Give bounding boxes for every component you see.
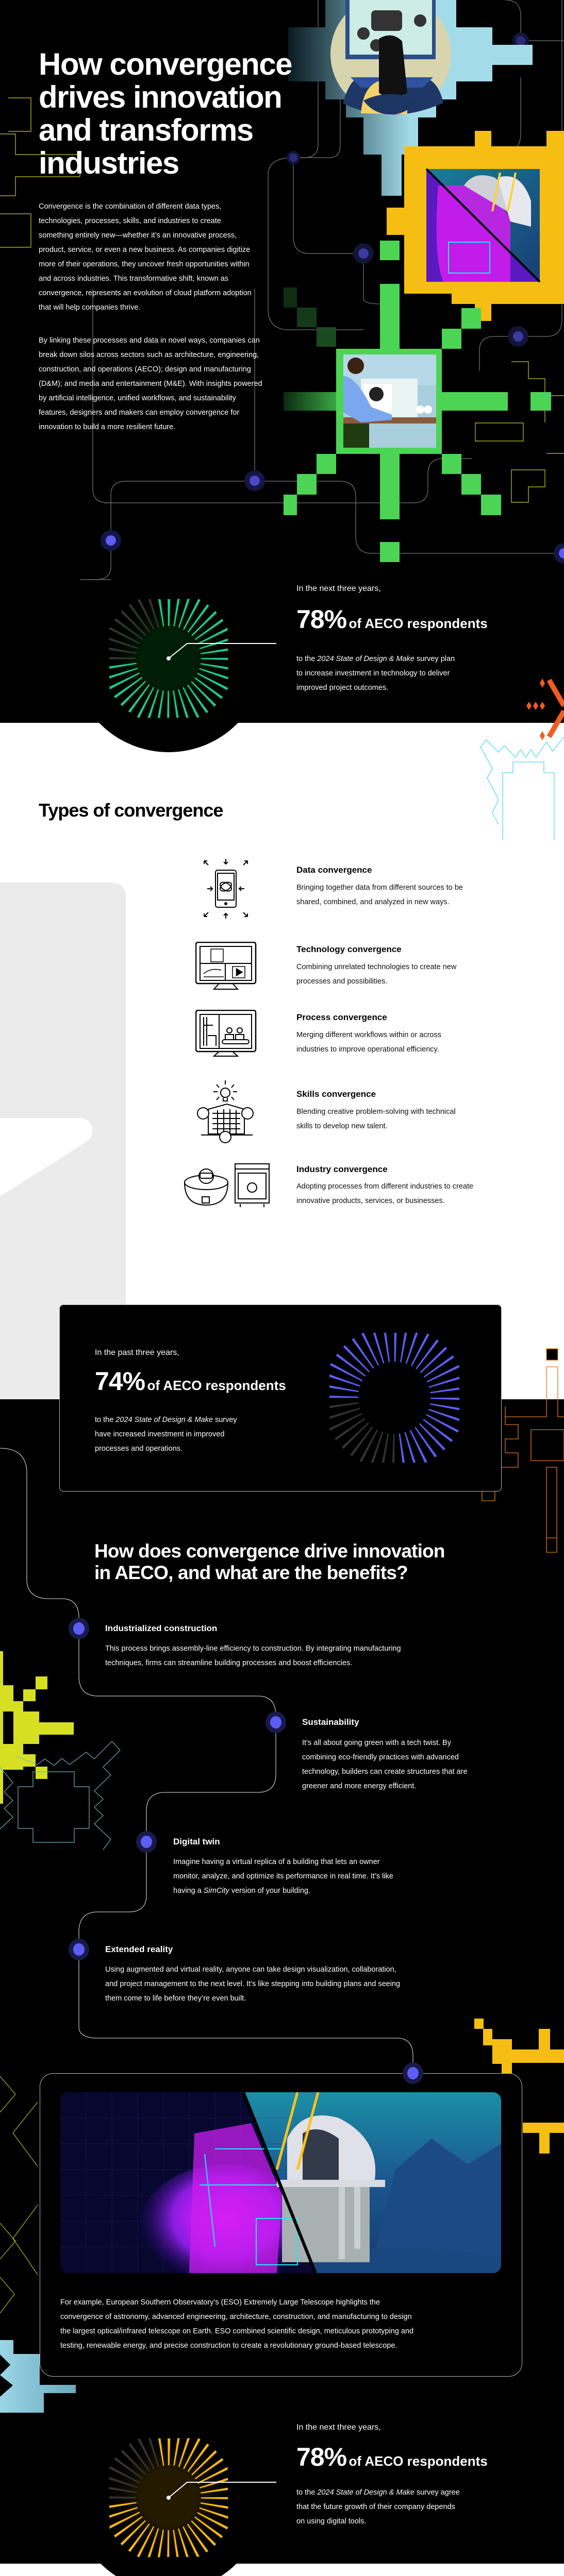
timeline item: extended reality: them come to life before they’re even built. (105, 1994, 246, 2003)
icon: timeline dot (136, 1831, 157, 1853)
intro text block: that will help companies thrive. (39, 303, 140, 312)
timeline item: digital twin: Digital twin (173, 1837, 220, 1846)
timeline item: extended reality: and project management to the next level. It’s like stepping into building plans and seeing (105, 1980, 400, 1988)
intro text block 2: features, designers and makers can employ convergence for (39, 409, 239, 417)
caption text (60, 2295, 413, 2353)
timeline item: industrialized construction (69, 1618, 401, 1667)
stat text: 74% of AECO respondents (95, 1367, 286, 1396)
caption text: For example, European Southern Observatory’s (ESO) Extremely Large Telescope highlights the (60, 2298, 380, 2307)
title: industries (39, 146, 179, 180)
body: industries to improve operational efficiency. (296, 1045, 439, 1054)
decoration: light blue pixel shape left (0, 2339, 77, 2414)
body (296, 1182, 473, 1205)
heading: Technology convergence (296, 944, 402, 954)
timeline item: sustainability: combining eco-friendly practices with advanced (302, 1753, 459, 1761)
intro text block: something entirely new—whether it’s an innovative process, (39, 231, 237, 240)
heading: Data convergence (296, 865, 372, 875)
stat text: 78% invest: In the next three years, (296, 584, 381, 593)
body (296, 884, 463, 906)
heading: Process convergence (296, 1012, 387, 1022)
intro text block: and across industries. This transformative shift, known as (39, 275, 228, 283)
intro text block 2: break down silos across sectors such as architecture, engineering, (39, 351, 259, 359)
icon: phone with arrows (204, 859, 248, 919)
stat text: to the 2024 State of Design & Make survey (95, 1416, 237, 1424)
stat text: 78% digital tools: 78% of AECO respondents (296, 2443, 488, 2471)
timeline dot on card (403, 2062, 423, 2084)
timeline item: extended reality: Extended reality (105, 1944, 173, 1954)
body: processes and possibilities. (296, 977, 388, 986)
decoration: light blue zigzag outline (0, 1741, 121, 1850)
heading: how does convergence drive innovation: How does convergence drive innovation (94, 1540, 445, 1562)
timeline item: industrialized construction: This process brings assembly-line efficiency to construction. By integrating manufacturing (105, 1645, 401, 1653)
timeline item: sustainability: Sustainability (302, 1717, 359, 1727)
illustration: green pixel frame with animator (284, 241, 551, 562)
stat text: 78% digital tools: In the next three years, (296, 2423, 381, 2432)
icon: VR person and printer (184, 1163, 270, 1207)
intro text block 2: construction, and operations (AECO); design and manufacturing (39, 365, 251, 374)
caption text: convergence of astronomy, advanced engineering, architecture, construction, and manufacturing to design (60, 2313, 412, 2321)
intro text block 2: innovation to build a more resilient future. (39, 423, 175, 431)
body: Adopting processes from different industries to create (296, 1182, 473, 1191)
icon: timeline dot (69, 1939, 89, 1960)
body (296, 1031, 441, 1054)
decoration: yellow pixel shape right (474, 2019, 564, 2154)
timeline item: sustainability: It’s all about going green with a tech twist. By (302, 1739, 451, 1747)
intro text block: more of their operations, they uncover fresh opportunities within (39, 260, 250, 268)
panel: industry convergence (184, 1163, 473, 1207)
timeline item: sustainability (266, 1711, 468, 1790)
stat text: 78% digital tools: to the 2024 State of Design & Make survey agree (296, 2488, 460, 2497)
intro text block (39, 202, 252, 312)
title: drives innovation (39, 80, 281, 114)
intro text block 2: (D&M); and media and entertainment (M&E). With insights powered (39, 380, 262, 388)
decoration: orange outline pixels right (482, 1348, 564, 1553)
intro text block: convergence, represents an evolution of cloud platform adoption (39, 289, 252, 297)
caption text: testing, renewable energy, and precise construction to create a revolutionary ground-based telescope. (60, 2342, 397, 2350)
heading: how does convergence drive innovation (94, 1540, 445, 1583)
title (39, 47, 292, 180)
panel: data convergence (204, 859, 463, 919)
timeline item: sustainability: greener and more energy efficient. (302, 1782, 416, 1790)
timeline item: industrialized construction: Industrialized construction (105, 1623, 217, 1633)
stat text (95, 1348, 286, 1453)
chart: 78% ring (green) (109, 599, 276, 718)
intro text block 2: By linking these processes and data in novel ways, companies can (39, 336, 260, 345)
background: gray decorative panel (0, 883, 126, 1399)
body (296, 1108, 456, 1130)
intro text block: Convergence is the combination of different data types, (39, 202, 221, 211)
timeline item: sustainability: technology, builders can create structures that are (302, 1768, 468, 1776)
stat text: In the past three years, (95, 1348, 179, 1357)
chart: 78% ring (yellow) (109, 2438, 276, 2557)
stat text: 78% invest: to increase investment in technology to deliver (296, 669, 450, 677)
body: skills to develop new talent. (296, 1122, 388, 1130)
background: bowl under first stat (72, 558, 266, 752)
body: Merging different workflows within or across (296, 1031, 441, 1039)
icon: monitor with factory (195, 1010, 257, 1057)
intro text block 2: by artificial intelligence, unified workflows, and sustainability (39, 394, 236, 402)
icon: monitor with grid (195, 942, 257, 990)
hero circuit lines and dots (0, 0, 564, 580)
heading: Industry convergence (296, 1164, 388, 1174)
icon: timeline dot (266, 1711, 286, 1733)
stat text: 78% invest: 78% of AECO respondents (296, 605, 488, 634)
background: dark lower section (0, 1399, 564, 2564)
timeline item: digital twin: Imagine having a virtual replica of a building that lets an owner (173, 1858, 380, 1866)
body: Combining unrelated technologies to create new (296, 963, 456, 971)
timeline item: digital twin: monitor, analyze, and optimize its performance in real time. It’s like (173, 1872, 393, 1880)
stat text: 78% invest: improved project outcomes. (296, 684, 388, 692)
stat text: 78% invest: to the 2024 State of Design & Make survey plan (296, 655, 455, 663)
stat text: have increased investment in improved (95, 1430, 224, 1438)
heading: Skills convergence (296, 1089, 376, 1099)
body (296, 963, 457, 986)
icon: bulb over building with people (197, 1080, 254, 1143)
background: dark hero section (0, 0, 564, 723)
illustration: light blue pixel frame with designer at computer (288, 0, 533, 196)
image: ESO Extremely Large Telescope (60, 2092, 501, 2273)
heading: types of convergence: Types of convergence (39, 800, 223, 821)
timeline item: extended reality: Using augmented and virtual reality, anyone can take design visualization, collaboration, (105, 1965, 396, 1974)
title: How convergence (39, 47, 292, 81)
body: shared, combined, and analyzed in new ways. (296, 898, 450, 906)
heading: how does convergence drive innovation: in AECO, and what are the benefits? (94, 1562, 408, 1583)
title: and transforms (39, 113, 253, 147)
decoration: yellow-green pixel cluster left (0, 1651, 74, 1804)
body: Bringing together data from different sources to be (296, 884, 463, 892)
card: ESO example (40, 2073, 522, 2377)
timeline path connecting benefits (0, 1448, 413, 2063)
panel: process convergence (195, 1010, 441, 1057)
timeline item: digital twin (136, 1831, 393, 1895)
stat text: 78% digital tools (296, 2421, 544, 2529)
card: 74% stat (59, 1304, 502, 1492)
background: bowl under third stat (72, 2398, 266, 2576)
stat text: processes and operations. (95, 1445, 183, 1453)
body: Blending creative problem-solving with technical (296, 1108, 456, 1116)
stat text: 78% invest (296, 584, 488, 692)
decoration: yellow line zigzag left (0, 2071, 41, 2318)
icon: timeline dot (69, 1618, 89, 1639)
body: innovative products, services, or businesses. (296, 1197, 445, 1205)
illustration: yellow pixel frame with telescope (387, 131, 564, 321)
intro text block 2 (39, 336, 262, 431)
timeline item: digital twin: having a SimCity version of your building. (173, 1887, 310, 1895)
panel: technology convergence (195, 942, 457, 990)
intro text block: product, service, or even a new business. As companies digitize (39, 246, 250, 254)
timeline item: industrialized construction: techniques, firms can streamline building processes and boost efficiencies. (105, 1659, 352, 1667)
decoration: orange pixel X and cyan outline (480, 679, 564, 840)
caption text: the largest optical/infrared telescope on Earth. ESO combined scientific design, meticulous prototyping and (60, 2327, 413, 2335)
panel: skills convergence (197, 1080, 456, 1143)
intro text block: technologies, processes, skills, and industries to create (39, 217, 221, 225)
stat text: 78% digital tools: that the future growth of their company depends (296, 2503, 455, 2511)
timeline item: extended reality (69, 1939, 400, 2003)
stat text: 78% digital tools: on using digital tools. (296, 2517, 366, 2526)
chart: 74% ring (blue) (329, 1333, 459, 1463)
